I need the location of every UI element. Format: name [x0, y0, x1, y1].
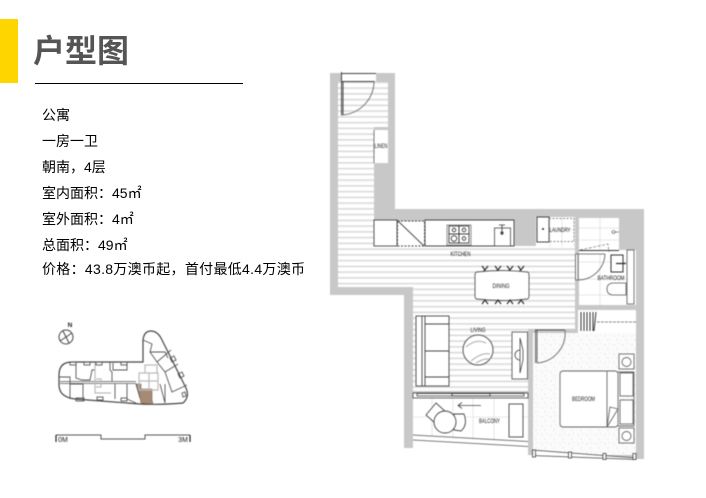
compass: N [68, 322, 73, 329]
scale bar: 3M [178, 437, 188, 444]
scale bar [56, 435, 190, 444]
bed [560, 354, 634, 443]
dining table and chairs [475, 266, 529, 304]
wall mass [330, 73, 644, 459]
title underline [35, 83, 243, 84]
sofa [416, 316, 449, 386]
yellow accent bar [0, 19, 18, 83]
living room: LIVING [470, 327, 486, 334]
tv unit [512, 332, 528, 379]
linen cupboard: LINEN [374, 143, 388, 150]
apartment details text block: 朝南，4层 [42, 159, 106, 175]
highlighted apartment [136, 384, 153, 404]
linen cupboard [374, 130, 388, 163]
key plan of building level [59, 331, 187, 404]
balcony balustrade [413, 435, 528, 446]
bathroom: BATHROOM [598, 275, 624, 282]
title: 户型图 [33, 33, 129, 69]
bathroom [576, 218, 636, 305]
living room [416, 316, 528, 386]
apartment details text block: 室内面积：45㎡ [42, 185, 142, 201]
balcony [413, 393, 528, 446]
bedroom door [535, 330, 565, 363]
round coffee table [463, 335, 493, 365]
apartment details text block: 室外面积：4㎡ [42, 211, 134, 227]
entry door [341, 72, 376, 115]
laundry: LAUNDRY [550, 227, 571, 234]
arrow [458, 402, 481, 408]
apartment details text block: 一房一卫 [42, 133, 98, 149]
kitchen counter and fridge [374, 220, 514, 246]
apartment details text block: 公寓 [42, 107, 70, 123]
scale bar: 0M [58, 437, 68, 444]
balcony: BALCONY [479, 418, 500, 425]
compass [59, 322, 73, 344]
laundry [536, 217, 575, 247]
balcony furniture [426, 403, 523, 437]
cooktop [447, 225, 471, 245]
balcony sliding door [413, 393, 528, 398]
main floor plan [330, 72, 644, 461]
kitchen sink [494, 225, 510, 246]
bedroom window [532, 450, 636, 460]
apartment details text block: 价格：43.8万澳币起，首付最低4.4万澳币 [42, 261, 305, 277]
apartment details text block [42, 107, 305, 277]
wardrobe with hangers [578, 310, 636, 333]
bedroom [532, 329, 636, 461]
apartment details text block: 总面积：49㎡ [42, 237, 128, 253]
bedroom: BEDROOM [572, 396, 595, 403]
dining table and chairs: DINING [492, 283, 510, 290]
kitchen label: KITCHEN [450, 251, 471, 258]
floor: entry, kitchen, dining, living [338, 82, 575, 391]
